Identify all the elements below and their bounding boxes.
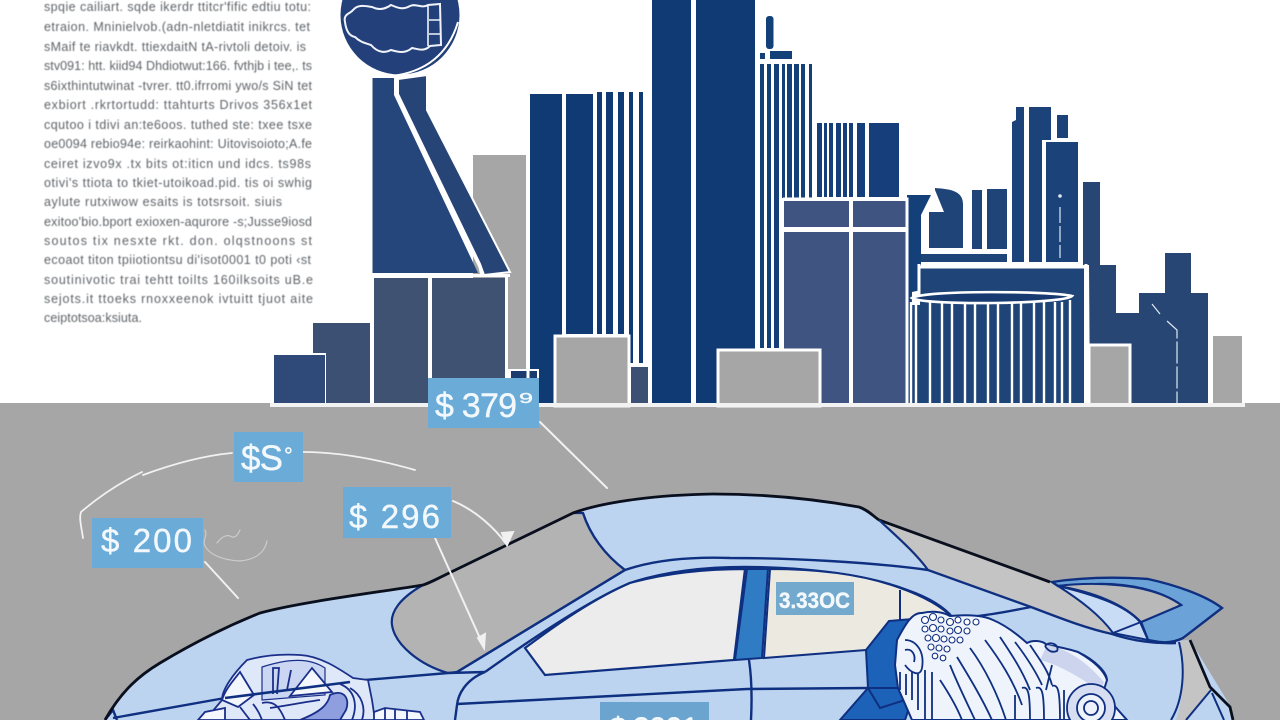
navy striped tower: [530, 92, 643, 403]
colonnade building: [911, 264, 1086, 403]
rear window: [764, 569, 953, 658]
text block: otivi's ttiota to tkiet-utoikoad.pid. tis oi swhig: [44, 176, 312, 190]
price label: short: [234, 432, 303, 482]
price label: rear window: 3.33OC: [779, 588, 850, 613]
door pillar: [735, 569, 768, 660]
text block: aylute rutxiwow esaits is totsrsoit. siuis: [44, 195, 282, 209]
price label: top: 9: [519, 390, 533, 407]
price label: left: $ 200: [101, 522, 192, 559]
mid-rise stripes: [817, 123, 899, 197]
rear engine dark housing: [840, 618, 925, 720]
text block: s6ixthintutwinat -tvrer. tt0.ifrromi ywo/s SiN tet: [44, 79, 313, 93]
arc left of short price: [80, 453, 232, 538]
text block: stv091: htt. kiid94 Dhdiotwut:166. fvthjb i tee,. ts: [44, 59, 312, 73]
text block: soutos tix nesxte rkt. don. olqstnoons st: [44, 234, 313, 248]
text block: etraion. Mninielvob.(adn-nletdiatit inikrcs. tet: [44, 20, 311, 34]
text block: [44, 0, 313, 325]
engine bead texture: [922, 614, 979, 661]
rear engine: [895, 612, 1127, 720]
tall right towers: [1012, 107, 1208, 403]
ground line: [270, 403, 1245, 407]
price label: short: °: [284, 443, 293, 468]
arrow to windshield: [435, 538, 483, 645]
faint swirl near left price: [204, 530, 267, 561]
callout leader lines: [80, 422, 607, 648]
leader from left price: [205, 562, 238, 598]
front window: [525, 569, 745, 675]
text block: ceiret izvo9x .tx bits ot:iticn und idcs. ts98s: [44, 157, 311, 171]
text block: ceiptotsoa:ksiuta.: [44, 311, 142, 325]
car outline: [105, 494, 1233, 720]
price label: top: [428, 378, 539, 428]
price label: top: $ 379: [435, 387, 517, 425]
price label: windshield: [343, 487, 451, 538]
text block: oe0094 rebio94e: reirkaohint: Uitovisoioto;A.fe: [44, 137, 312, 151]
car illustration: [105, 494, 1233, 720]
low slate blocks: [272, 323, 370, 403]
text block: soutinivotic trai tehtt toilts 160ilksoits uB.e: [44, 273, 313, 287]
engine pulley: [1067, 684, 1115, 720]
price label: short: $S: [241, 439, 283, 478]
front engine: [198, 655, 424, 720]
antenna tower with stripes: [760, 16, 812, 348]
arrow to roofline: [453, 501, 507, 545]
gray low building: [555, 336, 629, 406]
gray right buildings: [1089, 336, 1242, 405]
windshield glass: [392, 513, 625, 673]
text block: cqutoo i tdivi an:te6oos. tuthed ste: txee tsxe: [44, 118, 312, 132]
rear glass: [879, 521, 1112, 634]
back right cluster: [907, 188, 1007, 403]
text block: exbiort .rkrtortudd: ttahturts Drivos 356x1et: [44, 98, 313, 112]
price label: bottom: [600, 702, 709, 720]
leader from top price: [540, 422, 607, 488]
slate blocked building: [784, 201, 906, 403]
small slate block: [631, 367, 648, 403]
observation tower: [340, 0, 510, 403]
price label: windshield: $ 296: [349, 498, 440, 535]
skyline illustration: [270, 0, 1245, 407]
spoiler: [1052, 578, 1222, 642]
price label: left: [92, 518, 203, 568]
car body: [105, 494, 1233, 720]
tallest navy tower: [652, 0, 755, 403]
arc right of short price: [303, 452, 415, 470]
roof lines: [105, 558, 1176, 720]
rear corner: [1171, 640, 1224, 720]
gray low building two: [718, 350, 820, 406]
text block: sejots.it ttoeks rnoxxeenok ivtuitt tjuot aite: [44, 292, 313, 306]
text block: exitoo'bio.bport exioxen-aqurore -s;Jusse9iosd: [44, 215, 312, 229]
text block: sMaif te riavkdt. ttiexdaitN tA-rivtoli detoiv. is: [44, 40, 306, 54]
text block: ecoaot titon tpiiotiontsu di'isot0001 t0 poti ‹st: [44, 253, 312, 267]
white outlines between blocks: [372, 0, 907, 403]
small block beside label: [510, 370, 538, 403]
text block: spqie cailiart. sqde ikerdr ttitcr'fific edtiu totu:: [44, 0, 311, 14]
roof panel seam: [583, 513, 928, 570]
tall gray building behind tower: [473, 155, 526, 369]
ground band: [0, 403, 1280, 720]
